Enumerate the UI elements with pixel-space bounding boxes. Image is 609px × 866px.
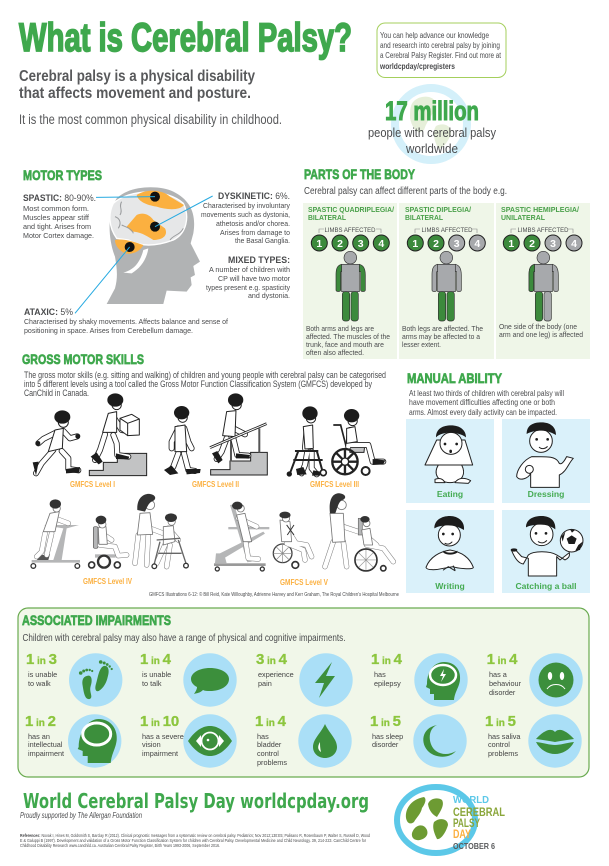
gross motor intro: The gross motor skills (e.g. sitting and walking) of children and young people with cerebral palsy can be categorised bbox=[24, 370, 386, 380]
panel: hemiplegia: SPASTIC HEMIPLEGIA/ bbox=[501, 205, 579, 214]
panel: hemiplegia: 2 bbox=[529, 238, 535, 250]
subtitle: Cerebral palsy is a physical disability bbox=[19, 68, 255, 85]
stat: sleep disorder: has sleep bbox=[372, 732, 403, 741]
stat: unable to talk: to talk bbox=[142, 679, 162, 688]
stat: bladder control bbox=[255, 713, 352, 768]
references: E & Galuppi B (1997). Development and validation of a Gross Motor Function Classification System for children with Cerebral Palsy. Developmental Medicine and Child Neurology. 39, 214-223. CanChild Centre for bbox=[20, 838, 366, 843]
stat: epilepsy: 1 in 4 bbox=[371, 651, 403, 668]
subtitle bbox=[19, 68, 255, 102]
stat: bladder control: 1 in 4 bbox=[255, 713, 287, 730]
text: ataxic bbox=[24, 307, 229, 335]
callout: register: and research into cerebral palsy by joining bbox=[380, 41, 500, 50]
stat: behaviour disorder: 1 in 4 bbox=[487, 651, 518, 668]
manual ability intro: arms. Almost every daily activity can be impacted. bbox=[409, 407, 557, 417]
text: dyskinetic: movements such as dystonia, bbox=[201, 210, 290, 219]
illustration: GMFCS level IV bbox=[31, 494, 188, 569]
references bbox=[20, 833, 370, 848]
text: spastic: and tight. Arises from bbox=[23, 222, 91, 231]
stat: unable to walk: 1 in 3 bbox=[26, 651, 57, 668]
panel: hemiplegia: LIMBS AFFECTED bbox=[517, 228, 569, 234]
stat: saliva control bbox=[485, 713, 582, 768]
text: mixed types: and dystonia. bbox=[248, 291, 290, 300]
label: level I: GMFCS Level I bbox=[70, 479, 115, 489]
stat: intellectual impairment: has an bbox=[28, 732, 50, 741]
text: dyskinetic: Characterised by involuntary bbox=[203, 201, 290, 210]
panel: quadriplegia: 2 bbox=[337, 238, 343, 250]
panel: quadriplegia: 3 bbox=[358, 238, 364, 250]
illustration: GMFCS level II bbox=[164, 393, 267, 475]
statistic: 17 million with globe: 17 million bbox=[385, 96, 479, 126]
panel: quadriplegia: affected. The muscles of the bbox=[306, 332, 390, 341]
panel: diplegia bbox=[399, 203, 494, 359]
stat: vision impairment: vision bbox=[142, 740, 161, 749]
logo: World Cerebral Palsy Day: WORLD bbox=[453, 794, 489, 806]
text: mixed types: types present e.g. spasticity bbox=[206, 283, 290, 292]
callout: register: a Cerebral Palsy Register. Find out more at bbox=[380, 51, 502, 60]
panel: diplegia: lesser extent. bbox=[402, 340, 441, 349]
heading: manual ability: MANUAL ABILITY bbox=[407, 370, 503, 386]
stat: intellectual impairment: intellectual bbox=[28, 740, 63, 749]
title: What is Cerebral Palsy? bbox=[19, 16, 352, 60]
callout: register bbox=[377, 23, 506, 78]
text: ataxic: ATAXIC: 5% bbox=[24, 307, 73, 317]
footer heading: World Cerebral Palsy Day worldcpday.org bbox=[23, 789, 369, 813]
panel: diplegia: 3 bbox=[454, 238, 460, 250]
panel: diplegia: 4 bbox=[474, 238, 480, 250]
manual ability intro: At least two thirds of children with cerebral palsy will bbox=[409, 388, 564, 398]
text: mixed types: MIXED TYPES: bbox=[228, 255, 290, 265]
manual ability intro bbox=[409, 388, 564, 417]
panel: diplegia: Both legs are affected. The bbox=[402, 324, 483, 333]
head diagram bbox=[75, 187, 213, 313]
logo: World Cerebral Palsy Day bbox=[397, 787, 505, 853]
stat: vision impairment bbox=[140, 713, 237, 768]
gross motor intro: CanChild in Canada. bbox=[24, 388, 89, 398]
stat: saliva control: has saliva bbox=[488, 732, 521, 741]
text: mixed types bbox=[206, 255, 291, 300]
panel: associated impairments bbox=[18, 608, 589, 777]
panel: writing bbox=[406, 510, 494, 593]
text: dyskinetic: athetosis and/or chorea. bbox=[216, 219, 290, 228]
stat: unable to walk bbox=[26, 651, 122, 707]
panel: eating: Eating bbox=[437, 489, 463, 499]
statistic: 17 million with globe: worldwide bbox=[405, 142, 458, 156]
text: dyskinetic: DYSKINETIC: 6%. bbox=[218, 191, 290, 201]
logo: World Cerebral Palsy Day: DAY bbox=[453, 827, 471, 841]
panel: eating bbox=[406, 419, 494, 503]
callout: register: worldcpday/cpregisters bbox=[379, 62, 455, 71]
stat: unable to talk: 1 in 4 bbox=[140, 651, 172, 668]
panel: hemiplegia: 1 bbox=[508, 238, 514, 250]
panel: quadriplegia: trunk, face and mouth are bbox=[306, 340, 384, 349]
intro sentence: It is the most common physical disability in childhood. bbox=[19, 112, 282, 127]
panel: quadriplegia: LIMBS AFFECTED bbox=[324, 228, 376, 234]
text: mixed types: A number of children with bbox=[209, 265, 290, 274]
stat: behaviour disorder: has a bbox=[489, 670, 508, 679]
stat: unable to walk: is unable bbox=[28, 670, 57, 679]
text: ataxic: positioning in space. Arises from Cerebellum damage. bbox=[24, 326, 193, 335]
label: level IV: GMFCS Level IV bbox=[83, 576, 132, 586]
heading: gross motor skills: GROSS MOTOR SKILLS bbox=[22, 351, 144, 367]
panel: quadriplegia bbox=[303, 203, 397, 359]
stat: bladder control: has bbox=[257, 732, 269, 741]
stat: epilepsy bbox=[371, 651, 468, 707]
panel: catching a ball: Catching a ball bbox=[515, 581, 577, 591]
panel: dressing: Dressing bbox=[528, 489, 564, 499]
panel: hemiplegia: arm and one leg) is affected bbox=[499, 330, 583, 339]
illustration: GMFCS level V bbox=[214, 493, 393, 571]
panel: diplegia: 1 bbox=[412, 238, 418, 250]
stat: epilepsy: epilepsy bbox=[374, 679, 401, 688]
text: ataxic: Characterised by shaky movements. Affects balance and sense of bbox=[24, 317, 229, 326]
label: level III: GMFCS Level III bbox=[310, 479, 359, 489]
panel: diplegia: arms may be affected to a bbox=[402, 332, 481, 341]
logo: World Cerebral Palsy Day: OCTOBER 6 bbox=[453, 842, 495, 851]
manual ability intro: have movement difficulties affecting one or both bbox=[409, 397, 555, 407]
text: spastic: Muscles appear stiff bbox=[23, 213, 90, 222]
panel: quadriplegia: SPASTIC QUADRIPLEGIA/ bbox=[308, 205, 394, 214]
text: dyskinetic bbox=[201, 191, 290, 245]
references: Childhood Disability Research www.canchild.ca. Australian Cerebral Palsy Register, Birth Years 1993-2006, September 2016. bbox=[20, 843, 220, 848]
panel: diplegia: SPASTIC DIPLEGIA/ bbox=[405, 205, 471, 214]
stat: sleep disorder: disorder bbox=[372, 740, 399, 749]
panel: quadriplegia: 4 bbox=[378, 238, 384, 250]
stat: saliva control: 1 in 5 bbox=[485, 713, 516, 730]
panel: hemiplegia: 4 bbox=[571, 238, 577, 250]
gross motor intro: into 5 different levels using a tool called the Gross Motor Function Classification System (GMFCS) developed by bbox=[24, 379, 372, 389]
panel: quadriplegia: often also affected. bbox=[306, 348, 364, 357]
gross motor intro bbox=[24, 370, 386, 398]
heading: parts of the body: PARTS OF THE BODY bbox=[304, 166, 416, 182]
logo: World Cerebral Palsy Day: CEREBRAL bbox=[453, 805, 505, 819]
panel: catching a ball bbox=[502, 510, 590, 593]
stat: pain: 3 in 4 bbox=[256, 651, 288, 668]
panel: hemiplegia: UNILATERAL bbox=[501, 213, 545, 222]
statistic: 17 million with globe: people with cerebral palsy bbox=[368, 126, 497, 140]
stat: behaviour disorder bbox=[487, 651, 583, 707]
stat: bladder control: bladder bbox=[257, 740, 282, 749]
parts of body intro: Cerebral palsy can affect different parts of the body e.g. bbox=[304, 186, 507, 197]
panel: diplegia: 2 bbox=[433, 238, 439, 250]
panel: hemiplegia: 3 bbox=[550, 238, 556, 250]
stat: intellectual impairment: 1 in 2 bbox=[25, 713, 56, 730]
panel: quadriplegia: 1 bbox=[316, 238, 322, 250]
text: dyskinetic: the Basal Ganglia. bbox=[235, 236, 290, 245]
stat: bladder control: control bbox=[257, 749, 279, 758]
stat: unable to talk bbox=[140, 651, 237, 707]
stat: vision impairment: impairment bbox=[142, 749, 178, 758]
illustration credit: GMFCS Illustrations 6-12: © Bill Reid, Kate Willoughby, Adrienne Harvey and Kerr Graham, The Royal Children's Hospital Melbourne bbox=[149, 591, 399, 598]
text: spastic: Most common form. bbox=[23, 204, 89, 213]
text: spastic: SPASTIC: 80-90%. bbox=[23, 193, 96, 203]
stat: intellectual impairment bbox=[25, 713, 121, 768]
stat: behaviour disorder: disorder bbox=[489, 688, 516, 697]
illustration: GMFCS level III bbox=[287, 406, 385, 477]
supporter line: Proudly supported by The Allergan Foundation bbox=[20, 811, 142, 820]
panel: diplegia: LIMBS AFFECTED bbox=[421, 228, 473, 234]
label: level II: GMFCS Level II bbox=[192, 479, 239, 489]
panel: diplegia: BILATERAL bbox=[405, 213, 443, 222]
label: level V: GMFCS Level V bbox=[280, 577, 328, 587]
subtitle: that affects movement and posture. bbox=[19, 85, 251, 102]
stat: unable to walk: to walk bbox=[28, 679, 51, 688]
panel: hemiplegia bbox=[496, 203, 590, 359]
stat: pain: experience bbox=[258, 670, 294, 679]
illustration: GMFCS level I bbox=[33, 393, 147, 476]
panel: dressing bbox=[502, 419, 590, 503]
stat: intellectual impairment: impairment bbox=[28, 749, 64, 758]
stat: sleep disorder: 1 in 5 bbox=[370, 713, 401, 730]
statistic: 17 million with globe bbox=[368, 88, 497, 160]
references: References: Novak I, Hines M, Goldsmith S, Barclay R (2012). Clinical prognostic messages from a systematic review on cerebral palsy. Pediatrics; Nov 2012;130:E5; Palisano R, Rosenbaum P, Walter S, Russell D, Wood bbox=[20, 833, 370, 838]
stat: sleep disorder bbox=[370, 713, 467, 768]
callout: register: You can help advance our knowledge bbox=[380, 31, 489, 40]
text: spastic bbox=[23, 193, 96, 240]
heading: associated impairments: ASSOCIATED IMPAIRMENTS bbox=[22, 612, 171, 628]
panel: hemiplegia: One side of the body (one bbox=[499, 322, 577, 331]
logo: World Cerebral Palsy Day: PALSY bbox=[453, 816, 480, 830]
stat: epilepsy: has bbox=[374, 670, 386, 679]
stat: vision impairment: has a severe bbox=[142, 732, 184, 741]
panel: writing: Writing bbox=[435, 581, 465, 591]
stat: bladder control: problems bbox=[257, 758, 287, 767]
impairments intro: Children with cerebral palsy may also have a range of physical and cognitive impairments. bbox=[22, 632, 346, 644]
stat: saliva control: control bbox=[488, 740, 510, 749]
text: mixed types: CP will have two motor bbox=[218, 274, 291, 283]
text: spastic: Motor Cortex damage. bbox=[23, 231, 94, 240]
panel: quadriplegia: Both arms and legs are bbox=[306, 324, 374, 333]
stat: unable to talk: is unable bbox=[142, 670, 171, 679]
text: dyskinetic: Arises from damage to bbox=[220, 228, 290, 237]
stat: pain: pain bbox=[258, 679, 272, 688]
stat: pain bbox=[256, 651, 353, 707]
panel: quadriplegia: BILATERAL bbox=[308, 213, 346, 222]
stat: saliva control: problems bbox=[488, 749, 518, 758]
stat: vision impairment: 1 in 10 bbox=[140, 713, 179, 730]
stat: behaviour disorder: behaviour bbox=[489, 679, 522, 688]
heading: motor types: MOTOR TYPES bbox=[23, 167, 102, 183]
